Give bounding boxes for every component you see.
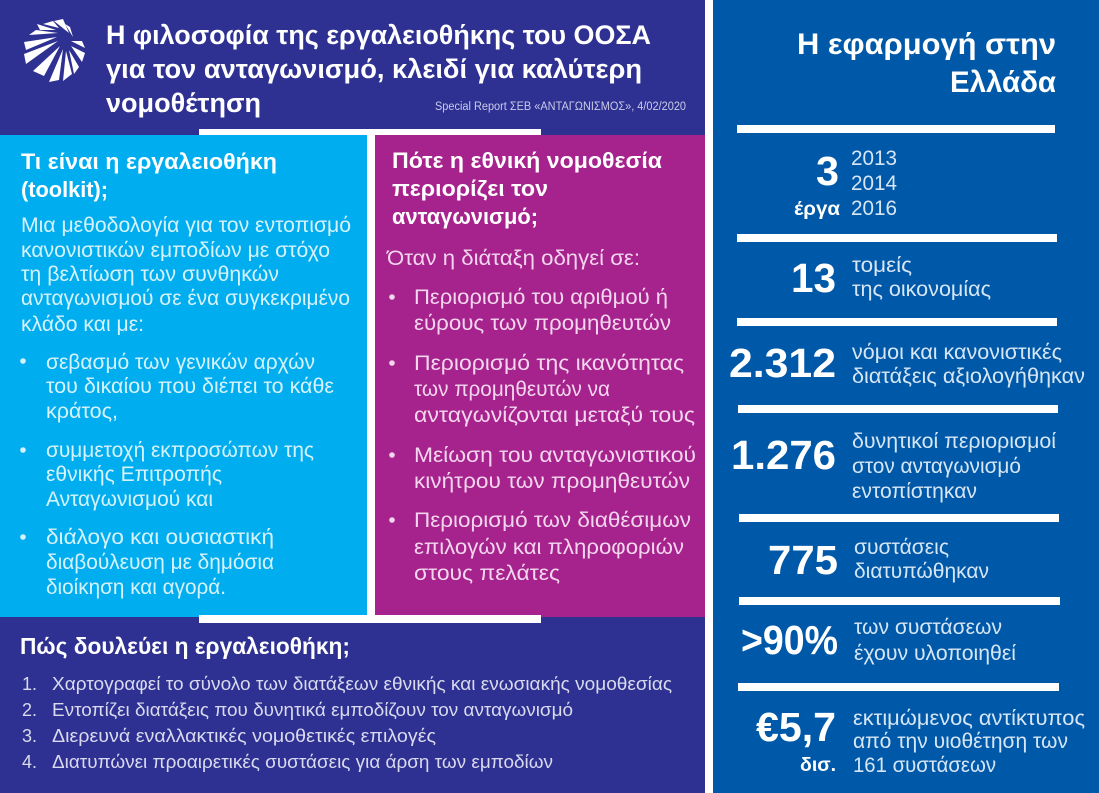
bullet list: Περιορισμό της ικανότητας bbox=[414, 351, 684, 375]
numbered list: 4. bbox=[22, 752, 37, 772]
stat: 2.312 laws bbox=[729, 340, 1085, 388]
stat: 5.7 billion euro: €5,7 bbox=[756, 704, 836, 750]
panel: application in Greece bbox=[713, 0, 1099, 793]
stat: 1.276 restrictions: εντοπίστηκαν bbox=[852, 480, 977, 503]
bullet list: εύρους των προμηθευτών bbox=[414, 311, 671, 335]
icon: logo bbox=[24, 19, 85, 82]
numbered list: Χαρτογραφεί το σύνολο των διατάξεων εθνικής και ενωσιακής νομοθεσίας bbox=[52, 674, 672, 694]
stat: 13 sectors: της οικονομίας bbox=[852, 278, 991, 301]
bullet list: συμμετοχή εκπροσώπων της bbox=[46, 439, 314, 462]
text block: definition: ανταγωνισμού σε ένα συγκεκριμένο bbox=[21, 287, 350, 310]
numbered list: 2. bbox=[22, 700, 37, 720]
heading: Πότε η εθνική νομοθεσία bbox=[392, 148, 662, 173]
numbered list: 3. bbox=[22, 726, 37, 746]
source note: Special Report ΣΕΒ «ΑΝΤΑΓΩΝΙΣΜΟΣ», 4/02/2020 bbox=[435, 101, 686, 113]
stat: 3 projects: 2014 bbox=[851, 172, 897, 195]
text block: definition: κλάδο και με: bbox=[21, 313, 144, 336]
stat: 13 sectors: τομείς bbox=[852, 254, 912, 277]
bullet list: επιλογών και πληροφοριών bbox=[414, 535, 684, 559]
bullet list bbox=[20, 351, 334, 599]
bullet list: κινήτρου των προμηθευτών bbox=[414, 469, 690, 493]
text block: definition: τη βελτίωση των συνθηκών bbox=[21, 263, 279, 286]
heading bbox=[797, 28, 1057, 99]
panel: header bbox=[0, 0, 705, 135]
bullet list: των προμηθευτών να bbox=[414, 377, 610, 401]
bullet list: Περιορισμό των διαθέσιμων bbox=[414, 508, 691, 532]
stat: over 90 percent: των συστάσεων bbox=[854, 616, 1002, 639]
stat: 5.7 billion euro: δισ. bbox=[800, 755, 836, 776]
stat: 2.312 laws: διατάξεις αξιολογήθηκαν bbox=[852, 365, 1085, 388]
stat: 1.276 restrictions: 1.276 bbox=[731, 432, 836, 478]
stat: 3 projects bbox=[794, 147, 897, 220]
stat: 5.7 billion euro: από την υιοθέτηση των bbox=[853, 730, 1068, 753]
heading: ανταγωνισμό; bbox=[392, 204, 538, 229]
stat: 3 projects: έργα bbox=[794, 199, 840, 220]
stat: 2.312 laws: 2.312 bbox=[729, 340, 836, 386]
stat: 13 sectors bbox=[791, 254, 991, 301]
numbered list bbox=[22, 674, 672, 772]
stat: 1.276 restrictions bbox=[731, 430, 1056, 503]
stat: 3 projects: 3 bbox=[816, 148, 839, 194]
stat: 1.276 restrictions: δυνητικοί περιορισμοί bbox=[852, 430, 1056, 453]
title: για τον ανταγωνισμό, κλειδί για καλύτερη bbox=[106, 54, 642, 84]
heading: Ελλάδα bbox=[950, 66, 1057, 99]
heading: Πώς δουλεύει η εργαλειοθήκη; bbox=[20, 633, 350, 659]
numbered list: Εντοπίζει διατάξεις που δυνητικά εμποδίζουν τον ανταγωνισμό bbox=[52, 700, 573, 720]
bullet list: Μείωση του ανταγωνιστικού bbox=[414, 443, 696, 467]
heading: (toolkit); bbox=[21, 177, 108, 202]
stat: 775 recommendations: συστάσεις bbox=[854, 536, 949, 559]
heading: Η εφαρμογή στην bbox=[797, 28, 1056, 61]
text block: definition bbox=[21, 214, 351, 336]
bullet list: σεβασμό των γενικών αρχών bbox=[46, 351, 315, 374]
bullet list: διοίκηση και αγορά. bbox=[46, 576, 226, 599]
stat: 775 recommendations: 775 bbox=[768, 537, 838, 583]
bullet list: του δικαίου που διέπει το κάθε bbox=[46, 375, 334, 398]
stat: 13 sectors: 13 bbox=[791, 255, 836, 301]
stat: 3 projects: 2016 bbox=[851, 197, 897, 220]
bullet list: εθνικής Επιτροπής bbox=[46, 463, 222, 486]
stat: over 90 percent: >90% bbox=[741, 617, 838, 663]
numbered list: Διερευνά εναλλακτικές νομοθετικές επιλογές bbox=[52, 726, 436, 746]
bullet list: Περιορισμό του αριθμού ή bbox=[414, 285, 668, 309]
stat: 5.7 billion euro bbox=[756, 704, 1085, 777]
bullet list: κράτος, bbox=[46, 400, 118, 423]
numbered list: Διατυπώνει προαιρετικές συστάσεις για άρση των εμποδίων bbox=[52, 752, 553, 772]
stat: over 90 percent: έχουν υλοποιηθεί bbox=[854, 642, 1016, 665]
panel: what is the toolkit bbox=[0, 135, 367, 617]
panel: when national law restricts competition bbox=[375, 135, 705, 617]
stat: 1.276 restrictions: στον ανταγωνισμό bbox=[852, 455, 1021, 478]
intro text: Όταν η διάταξη οδηγεί σε: bbox=[386, 246, 640, 270]
stat: over 90 percent bbox=[741, 616, 1016, 665]
bullet list: ανταγωνίζονται μεταξύ τους bbox=[414, 403, 695, 427]
stat: 2.312 laws: νόμοι και κανονιστικές bbox=[852, 341, 1062, 364]
text block: definition: κανονιστικών εμποδίων με στόχο bbox=[21, 239, 330, 262]
heading bbox=[392, 148, 662, 229]
stat: 775 recommendations: διατυπώθηκαν bbox=[854, 560, 989, 583]
title bbox=[106, 20, 651, 118]
stat: 5.7 billion euro: 161 συστάσεων bbox=[853, 754, 996, 777]
stat: 775 recommendations bbox=[768, 536, 989, 583]
heading: περιορίζει τον bbox=[392, 176, 548, 201]
bullet list bbox=[389, 285, 696, 585]
bullet list: διάλογο και ουσιαστική bbox=[46, 526, 274, 549]
bullet list: Ανταγωνισμού και bbox=[46, 488, 213, 511]
bullet list: διαβούλευση με δημόσια bbox=[46, 551, 274, 574]
title: νομοθέτηση bbox=[106, 88, 261, 118]
bullet list: στους πελάτες bbox=[414, 561, 560, 585]
text block: definition: Μια μεθοδολογία για τον εντοπισμό bbox=[21, 214, 351, 237]
stat: 3 projects: 2013 bbox=[851, 147, 897, 170]
heading: Τι είναι η εργαλειοθήκη bbox=[21, 149, 277, 174]
title: Η φιλοσοφία της εργαλειοθήκης του ΟΟΣΑ bbox=[106, 20, 651, 50]
stat: 5.7 billion euro: εκτιμώμενος αντίκτυπος bbox=[853, 707, 1085, 730]
numbered list: 1. bbox=[22, 674, 37, 694]
heading bbox=[21, 149, 277, 202]
panel: how the toolkit works bbox=[0, 617, 705, 793]
